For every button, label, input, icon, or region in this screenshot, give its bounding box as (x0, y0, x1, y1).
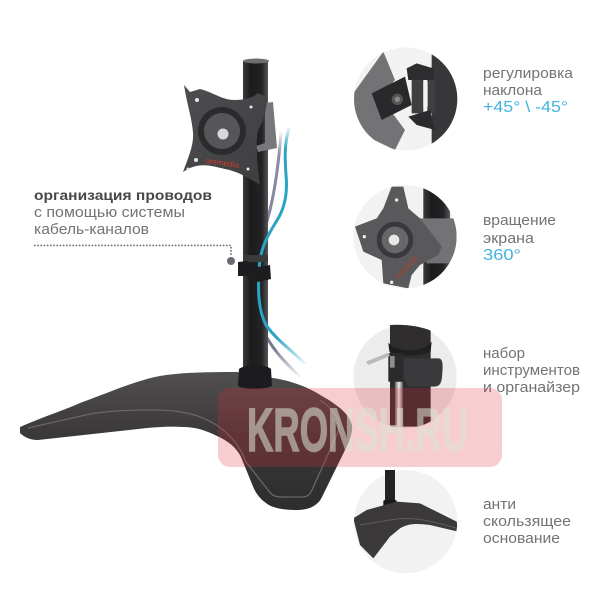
base label (483, 496, 571, 547)
organiser label: набор (483, 345, 525, 362)
plate hub (218, 128, 228, 140)
rotation label (483, 212, 556, 264)
plate brand: ommedia (205, 156, 240, 170)
callout text line 2: кабель-каналов (34, 222, 149, 238)
rotation label: вращение (483, 212, 556, 229)
pole top cap (243, 58, 269, 64)
callout: cable organisation (34, 187, 235, 265)
cable clamp (238, 255, 271, 282)
organiser label: и органайзер (483, 379, 580, 396)
base collar (238, 365, 272, 389)
base label: анти (483, 496, 516, 513)
organiser photo circle (353, 325, 457, 428)
plate outer ring (198, 107, 246, 155)
base label: основание (483, 530, 560, 547)
rotation photo circle (353, 185, 457, 292)
organiser label: инструментов (483, 362, 580, 379)
tilt label: +45° \ -45° (483, 99, 568, 116)
panel: anti-slip base (353, 470, 571, 573)
pole (243, 60, 268, 380)
panel: tilt (353, 47, 574, 151)
organiser label (483, 345, 580, 396)
callout dot (227, 257, 235, 265)
base photo circle (353, 470, 458, 573)
panel: tools and organiser (353, 325, 580, 428)
VESA plate (183, 85, 267, 185)
watermark (218, 388, 502, 467)
callout dotted leader (34, 246, 231, 256)
plate inner disc (204, 113, 240, 149)
panel: rotation (353, 185, 556, 292)
base label: скользящее (483, 513, 571, 530)
base ridge highlight (28, 400, 339, 497)
stand base (20, 372, 352, 510)
tilt label: регулировка (483, 65, 574, 82)
cable: grey (256, 132, 300, 377)
mount arm (256, 102, 277, 152)
tilt label (483, 65, 574, 116)
tilt label: наклона (483, 82, 543, 99)
rotation photo circle: ommedia (393, 253, 420, 281)
rotation label: экрана (483, 230, 535, 247)
tilt photo circle (353, 47, 460, 151)
cable: teal (259, 128, 305, 364)
callout text line 1: с помощью системы (34, 205, 185, 221)
monitor stand product (20, 58, 352, 510)
callout heading: организация проводов (34, 187, 212, 203)
plate mounting holes (186, 98, 252, 170)
rotation label: 360° (483, 247, 521, 264)
